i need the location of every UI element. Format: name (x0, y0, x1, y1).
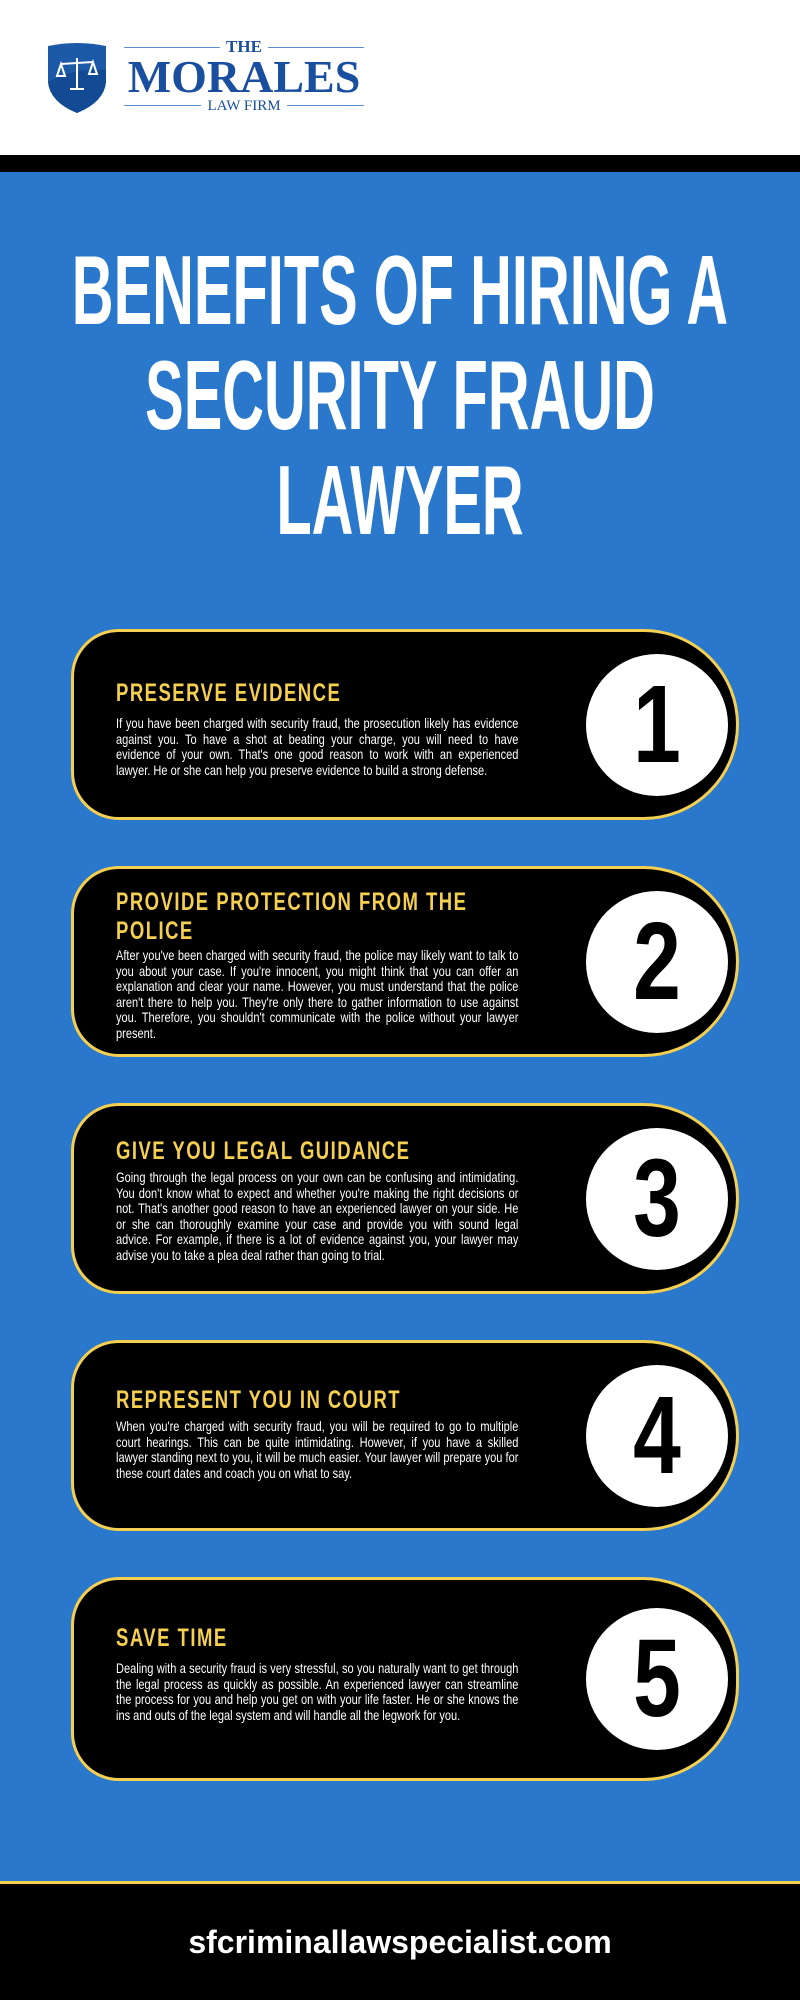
number 5 (586, 1608, 728, 1750)
number 3 (586, 1128, 728, 1270)
logo text: MORALES (128, 51, 360, 102)
number 5: 5 (633, 1617, 681, 1740)
card 4: REPRESENT YOU IN COURT (116, 1386, 401, 1414)
number 2 (586, 890, 728, 1032)
title (72, 238, 728, 553)
card 1: If you have been charged with security fraud, the prosecution likely has evidence against you. To have a shot at beating your charge, you will need to have evidence of your own. That's one good reason to work with an experienced lawyer. He or she can help you preserve evidence to build a strong defense. (116, 716, 518, 778)
card 2: PROVIDE PROTECTION FROM THE (116, 888, 467, 916)
title: SECURITY FRAUD (145, 340, 655, 450)
title: BENEFITS OF HIRING A (72, 238, 728, 345)
footer url (0, 1884, 800, 2000)
card 2: POLICE (116, 917, 194, 945)
logo text: LAW FIRM (207, 98, 281, 114)
number 4: 4 (633, 1374, 681, 1496)
card 2: After you've been charged with security fraud, the police may likely want to talk to you about your case. If you're innocent, you might think that you can offer an explanation and clear your name. However, you must understand that the police aren't there to help you. They're only there to gather information to use against you. Therefore, you shouldn't communicate with the police without your lawyer present. (116, 948, 518, 1040)
logo text (124, 37, 364, 114)
card 5: SAVE TIME (116, 1624, 228, 1652)
card 5 (71, 1577, 739, 1781)
logo text: THE (226, 37, 262, 56)
card 3 (71, 1103, 739, 1294)
icon: shield (48, 43, 106, 113)
number 1: 1 (633, 662, 681, 786)
title: LAWYER (276, 445, 524, 553)
footer url: sfcriminallawspecialist.com (188, 1924, 612, 1960)
card 1 (71, 629, 739, 820)
card 2 (71, 866, 739, 1057)
number 2: 2 (633, 900, 681, 1022)
number 1 (586, 654, 728, 796)
number 3: 3 (633, 1136, 681, 1260)
card 5: Dealing with a security fraud is very stressful, so you naturally want to get through the legal process as quickly as possible. An experienced lawyer can streamline the process for you and help you get on with your life faster. He or she knows the ins and outs of the legal system and will handle all the legwork for you. (116, 1661, 518, 1722)
card 1: PRESERVE EVIDENCE (116, 679, 341, 707)
card 4: When you're charged with security fraud, you will be required to go to multiple court hearings. This can be quite intimidating. However, if you have a skilled lawyer standing next to you, it will be much easier. Your lawyer will prepare you for these court dates and coach you on what to say. (116, 1419, 518, 1480)
card 3: Going through the legal process on your own can be confusing and intimidating. You don't know what to expect and whether you're making the right decisions or not. That's another good reason to have an experienced lawyer on your side. He or she can thoroughly examine your case and provide you with sound legal advice. For example, if there is a lot of evidence against you, your lawyer may advise you to take a plea deal rather than going to trial. (116, 1170, 518, 1262)
card 4 (71, 1340, 739, 1531)
card 3: GIVE YOU LEGAL GUIDANCE (116, 1137, 410, 1165)
number 4 (586, 1364, 728, 1506)
header (0, 0, 800, 155)
logo (48, 37, 364, 114)
